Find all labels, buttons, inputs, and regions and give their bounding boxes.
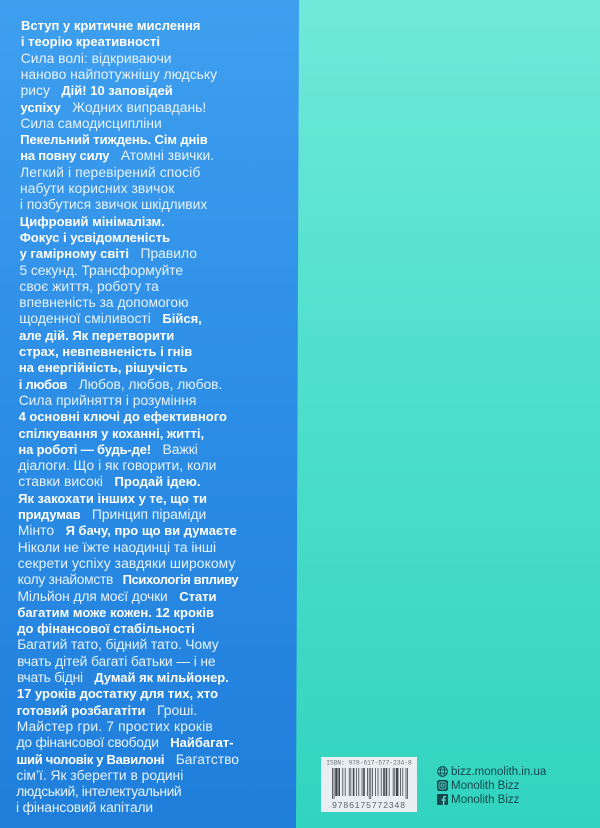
book list text block: спілкування у коханні, житті, bbox=[18, 426, 204, 440]
book list text block: 17 уроків достатку для тих, хто bbox=[17, 686, 218, 701]
book list text block: Мільйон для моєї дочки Стати bbox=[18, 588, 217, 604]
book list text block: 4 основні ключі до ефективного bbox=[19, 409, 227, 424]
contacts block bbox=[437, 766, 546, 806]
book list text block: до фінансової свободи Найбагат- bbox=[17, 734, 234, 750]
book list text block: успіху Жодних виправдань! bbox=[20, 98, 206, 114]
book list text block: Мінто Я бачу, про що ви думаєте bbox=[18, 522, 237, 538]
book list text block: ший чоловік у Вавилоні Багатство bbox=[16, 750, 239, 766]
book list text block: своє життя, роботу та bbox=[19, 278, 159, 294]
book list text block: у гамірному світі Правило bbox=[20, 245, 197, 261]
book list text block: Цифровий мінімалізм. bbox=[20, 214, 165, 229]
book list text block: страх, невпевненість і гнів bbox=[19, 344, 192, 359]
book list text block: на повну силу Атомні звички. bbox=[20, 147, 214, 163]
book list text block: рису Дій! 10 заповідей bbox=[21, 82, 173, 98]
book list text block: Майстер гри. 7 простих кроків bbox=[17, 718, 213, 734]
book list text block: Фокус і усвідомленість bbox=[20, 230, 170, 245]
icon: facebook bbox=[437, 794, 448, 805]
book list text block: колу знайомств Психологія впливу bbox=[18, 571, 238, 587]
book list text block: Сила волі: відкриваючи bbox=[21, 50, 172, 66]
book list text block: впевненість за допомогою bbox=[19, 294, 188, 310]
book list text block: Пекельний тиждень. Сім днів bbox=[20, 132, 208, 147]
book list text block: вчать бідні Думай як мільйонер. bbox=[17, 669, 229, 685]
book list text block: і любов Любов, любов, любов. bbox=[19, 376, 222, 392]
book list text block: щоденної сміливості Бійся, bbox=[19, 310, 202, 326]
book list text block: Сила самодисципліни bbox=[20, 115, 162, 131]
book list text block: багатим може кожен. 12 кроків bbox=[17, 605, 214, 620]
book list text block: на енергійність, рішучість bbox=[19, 360, 188, 375]
book list text block: і теорію креативності bbox=[21, 34, 160, 49]
book list text block: сім’ї. Як зберегти в родині bbox=[16, 767, 183, 783]
book list text block: Вступ у критичне мислення bbox=[21, 18, 200, 33]
barcode with ISBN: ISBN: 978-617-577-234-8 bbox=[326, 760, 412, 766]
book list text block: Сила прийняття і розуміння bbox=[19, 392, 196, 408]
icon: globe bbox=[437, 766, 448, 777]
book list text block: придумав Принцип піраміди bbox=[18, 506, 206, 522]
barcode with ISBN bbox=[321, 757, 417, 812]
icon: instagram bbox=[437, 780, 448, 791]
barcode with ISBN: 9786175772348 bbox=[332, 800, 406, 810]
book list text block: Легкий і перевірений спосіб bbox=[20, 164, 200, 180]
book list text block: ставки високі Продай ідею. bbox=[18, 473, 200, 489]
instagram name: Monolith Bizz bbox=[451, 780, 519, 792]
book list text block: але дій. Як перетворити bbox=[19, 328, 174, 343]
book list text block: Ніколи не їжте наодинці та інші bbox=[18, 539, 216, 555]
website link: bizz.monolith.in.ua bbox=[451, 766, 546, 778]
book list text block: на роботі — будь-де! Важкі bbox=[18, 441, 198, 457]
book list text block: Багатий тато, бідний тато. Чому bbox=[17, 636, 219, 652]
book list text block: до фінансової стабільності bbox=[17, 621, 195, 636]
book list text block: і фінансовий капітали bbox=[16, 799, 153, 815]
book list text block: вчать дітей багаті батьки — і не bbox=[17, 653, 215, 669]
book list text block: 5 секунд. Трансформуйте bbox=[20, 262, 183, 278]
book list text block: наново найпотужнішу людську bbox=[21, 66, 217, 82]
book list text block: готовий розбагатіти Гроші. bbox=[17, 702, 197, 718]
book list text block: людський, інтелектуальний bbox=[16, 783, 181, 799]
book list text block: Як закохати інших у те, що ти bbox=[18, 491, 207, 506]
facebook name: Monolith Bizz bbox=[451, 794, 519, 806]
book list text block: секрети успіху завдяки широкому bbox=[18, 555, 235, 571]
book list text block: набути корисних звичок bbox=[20, 180, 174, 196]
book list text block: діалоги. Що і як говорити, коли bbox=[18, 457, 216, 473]
book list text block bbox=[16, 18, 239, 815]
book list text block: і позбутися звичок шкідливих bbox=[20, 196, 207, 212]
